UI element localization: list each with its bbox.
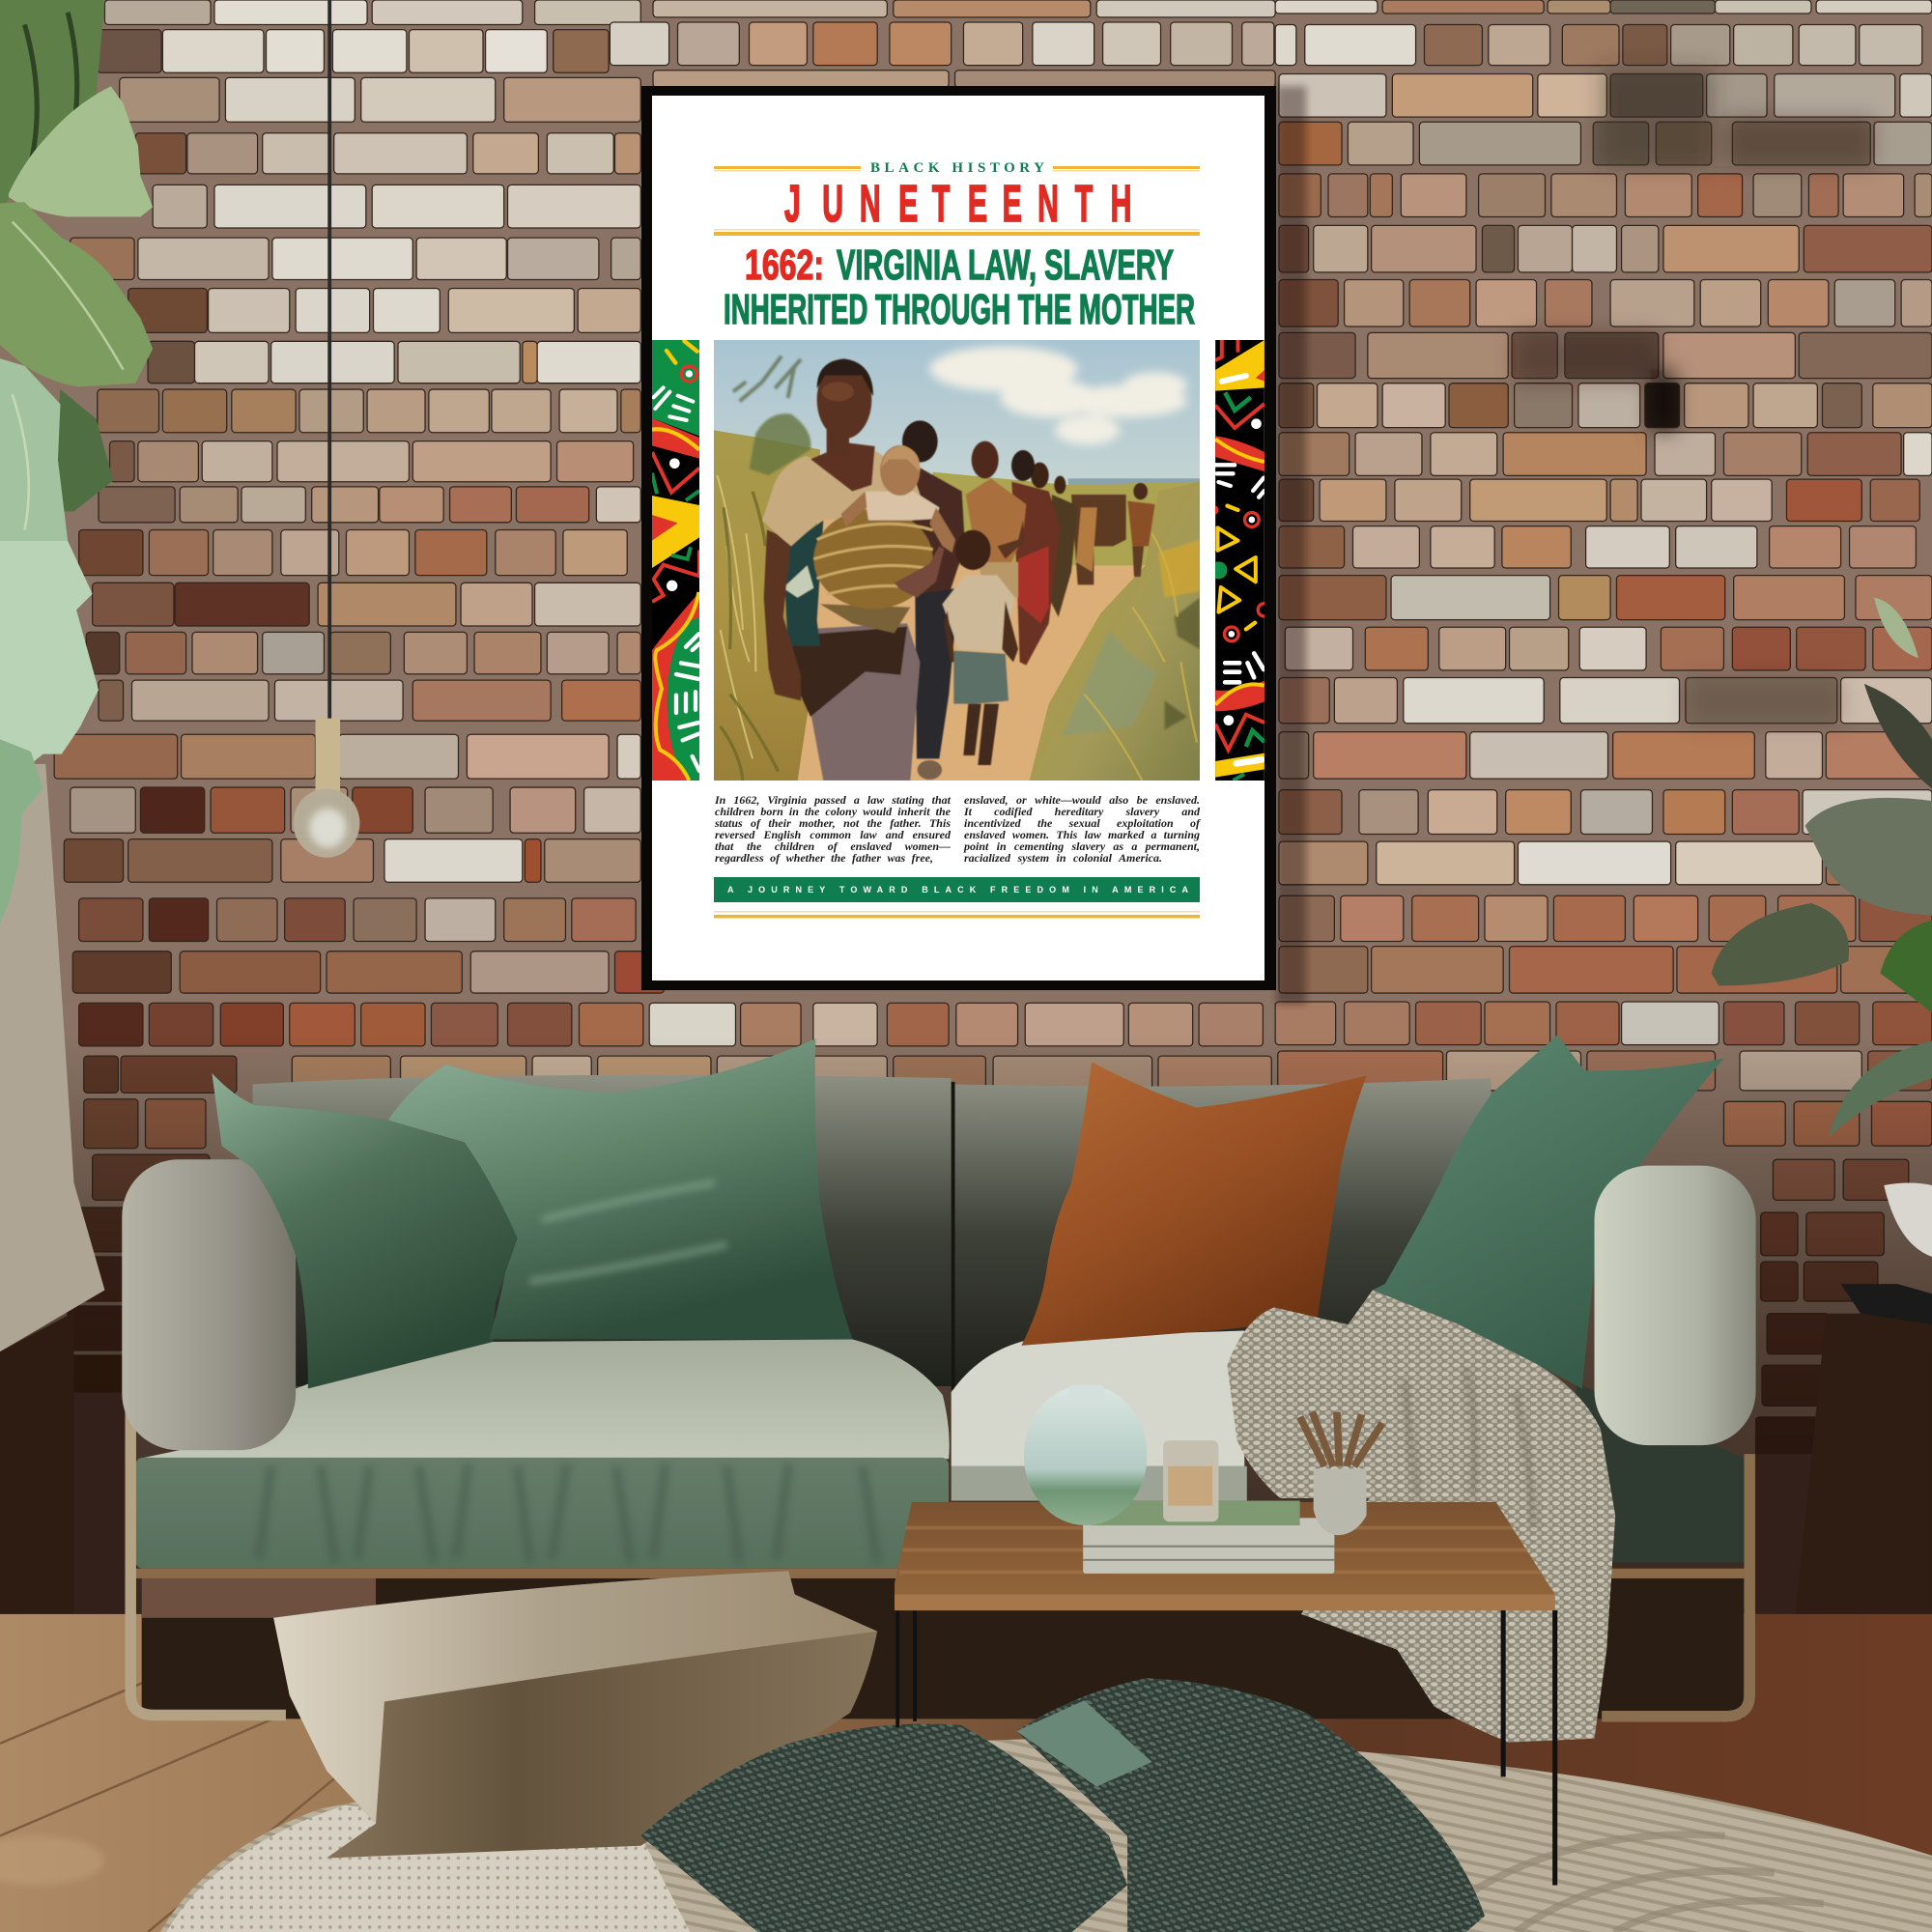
column right: incentivized the sexual exploitation of <box>964 816 1200 830</box>
under-sofa shadow <box>142 1577 1744 1719</box>
header rules <box>714 166 1200 236</box>
poster frame <box>641 86 1276 990</box>
woman left arm <box>764 530 801 700</box>
grass right <box>1030 482 1200 781</box>
heading: INHERITED THROUGH THE MOTHER <box>724 287 1195 333</box>
right arm cushion <box>1595 1166 1756 1445</box>
sofa <box>122 1035 1756 1719</box>
column right: point in cementing slavery as a permanent, <box>964 839 1200 853</box>
footer rule <box>714 911 1200 918</box>
right pattern strip <box>1215 340 1264 781</box>
column left: In 1662, Virginia passed a law stating that <box>715 793 951 807</box>
curtain <box>0 764 104 1351</box>
clouds <box>929 347 1187 444</box>
column right: enslaved, or white—would also be enslaved. <box>964 793 1200 807</box>
pillow green right <box>1373 1035 1723 1388</box>
seat left <box>138 1339 950 1459</box>
pillow green center <box>388 1038 853 1339</box>
rug <box>160 1737 1932 1932</box>
seat left front <box>135 1458 949 1569</box>
woman shirt <box>762 446 926 546</box>
wood rail <box>135 1569 1752 1578</box>
frame shadow <box>1276 86 1306 1005</box>
baby <box>841 445 955 553</box>
woman right hand <box>895 546 944 598</box>
pillow rust <box>1021 1062 1367 1346</box>
left leg <box>130 1355 286 1716</box>
seat right <box>952 1331 1244 1466</box>
grass left <box>714 430 820 781</box>
column left: status of their mother, not the father. This <box>715 816 951 830</box>
woman 3 in red <box>1011 450 1060 666</box>
plant right <box>1712 598 1932 1137</box>
column left: children born in the colony would inherit the <box>715 805 951 818</box>
coffee table <box>895 1502 1557 1886</box>
woman 2 <box>966 441 1026 598</box>
body text <box>715 793 1201 865</box>
table decor <box>1024 1385 1382 1574</box>
left pattern strip <box>652 340 699 781</box>
column right <box>963 793 1201 865</box>
seat right front <box>1576 1382 1748 1562</box>
grass strokes left <box>717 475 755 758</box>
column right: enslaved women. This law marked a turning <box>964 828 1200 841</box>
painting: family walking <box>714 340 1200 781</box>
floor <box>0 1614 1932 1932</box>
column left <box>715 793 951 865</box>
column right: racialized system in colonial America. <box>964 851 1162 865</box>
column left: that the children of enslaved women— <box>715 839 951 853</box>
stump left <box>0 1312 74 1663</box>
woman head <box>817 358 873 456</box>
right leg <box>1602 1454 1749 1717</box>
footer banner <box>714 877 1200 902</box>
knit throw <box>1227 1290 1615 1743</box>
plant left <box>0 0 153 924</box>
figures <box>762 358 1155 781</box>
basket <box>813 509 933 609</box>
lower wall shadow fill <box>68 1392 1861 1725</box>
kicker: BLACK HISTORY <box>870 160 1044 176</box>
heading: 1662: <box>745 242 824 289</box>
column left: regardless of whether the father was free, <box>715 851 933 865</box>
pillow green left <box>212 1073 518 1388</box>
title: JUNETEENTH: JUNETEENTH <box>784 175 1132 233</box>
heading <box>724 242 1195 333</box>
cloth bundle <box>783 521 823 646</box>
distant walkers <box>1049 476 1155 617</box>
tree left <box>733 356 810 475</box>
woman skirt <box>791 623 920 781</box>
footer banner: A JOURNEY TOWARD BLACK FREEDOM IN AMERICA <box>727 885 1188 895</box>
child <box>943 530 1018 765</box>
side stump right <box>1785 1182 1932 1719</box>
floor pillows <box>640 1678 1485 1932</box>
poster paper <box>652 96 1264 980</box>
left arm cushion <box>122 1159 296 1450</box>
heading: VIRGINIA LAW, SLAVERY <box>837 242 1174 289</box>
pendant lamp <box>294 0 359 858</box>
wall grime marks <box>1516 68 1873 724</box>
back cushions <box>252 1075 952 1386</box>
column left: reversed English common law and ensured <box>715 828 951 841</box>
floor pouf <box>273 1571 877 1858</box>
column right: It codified hereditary slavery and <box>964 805 1200 818</box>
man behind <box>902 420 965 780</box>
